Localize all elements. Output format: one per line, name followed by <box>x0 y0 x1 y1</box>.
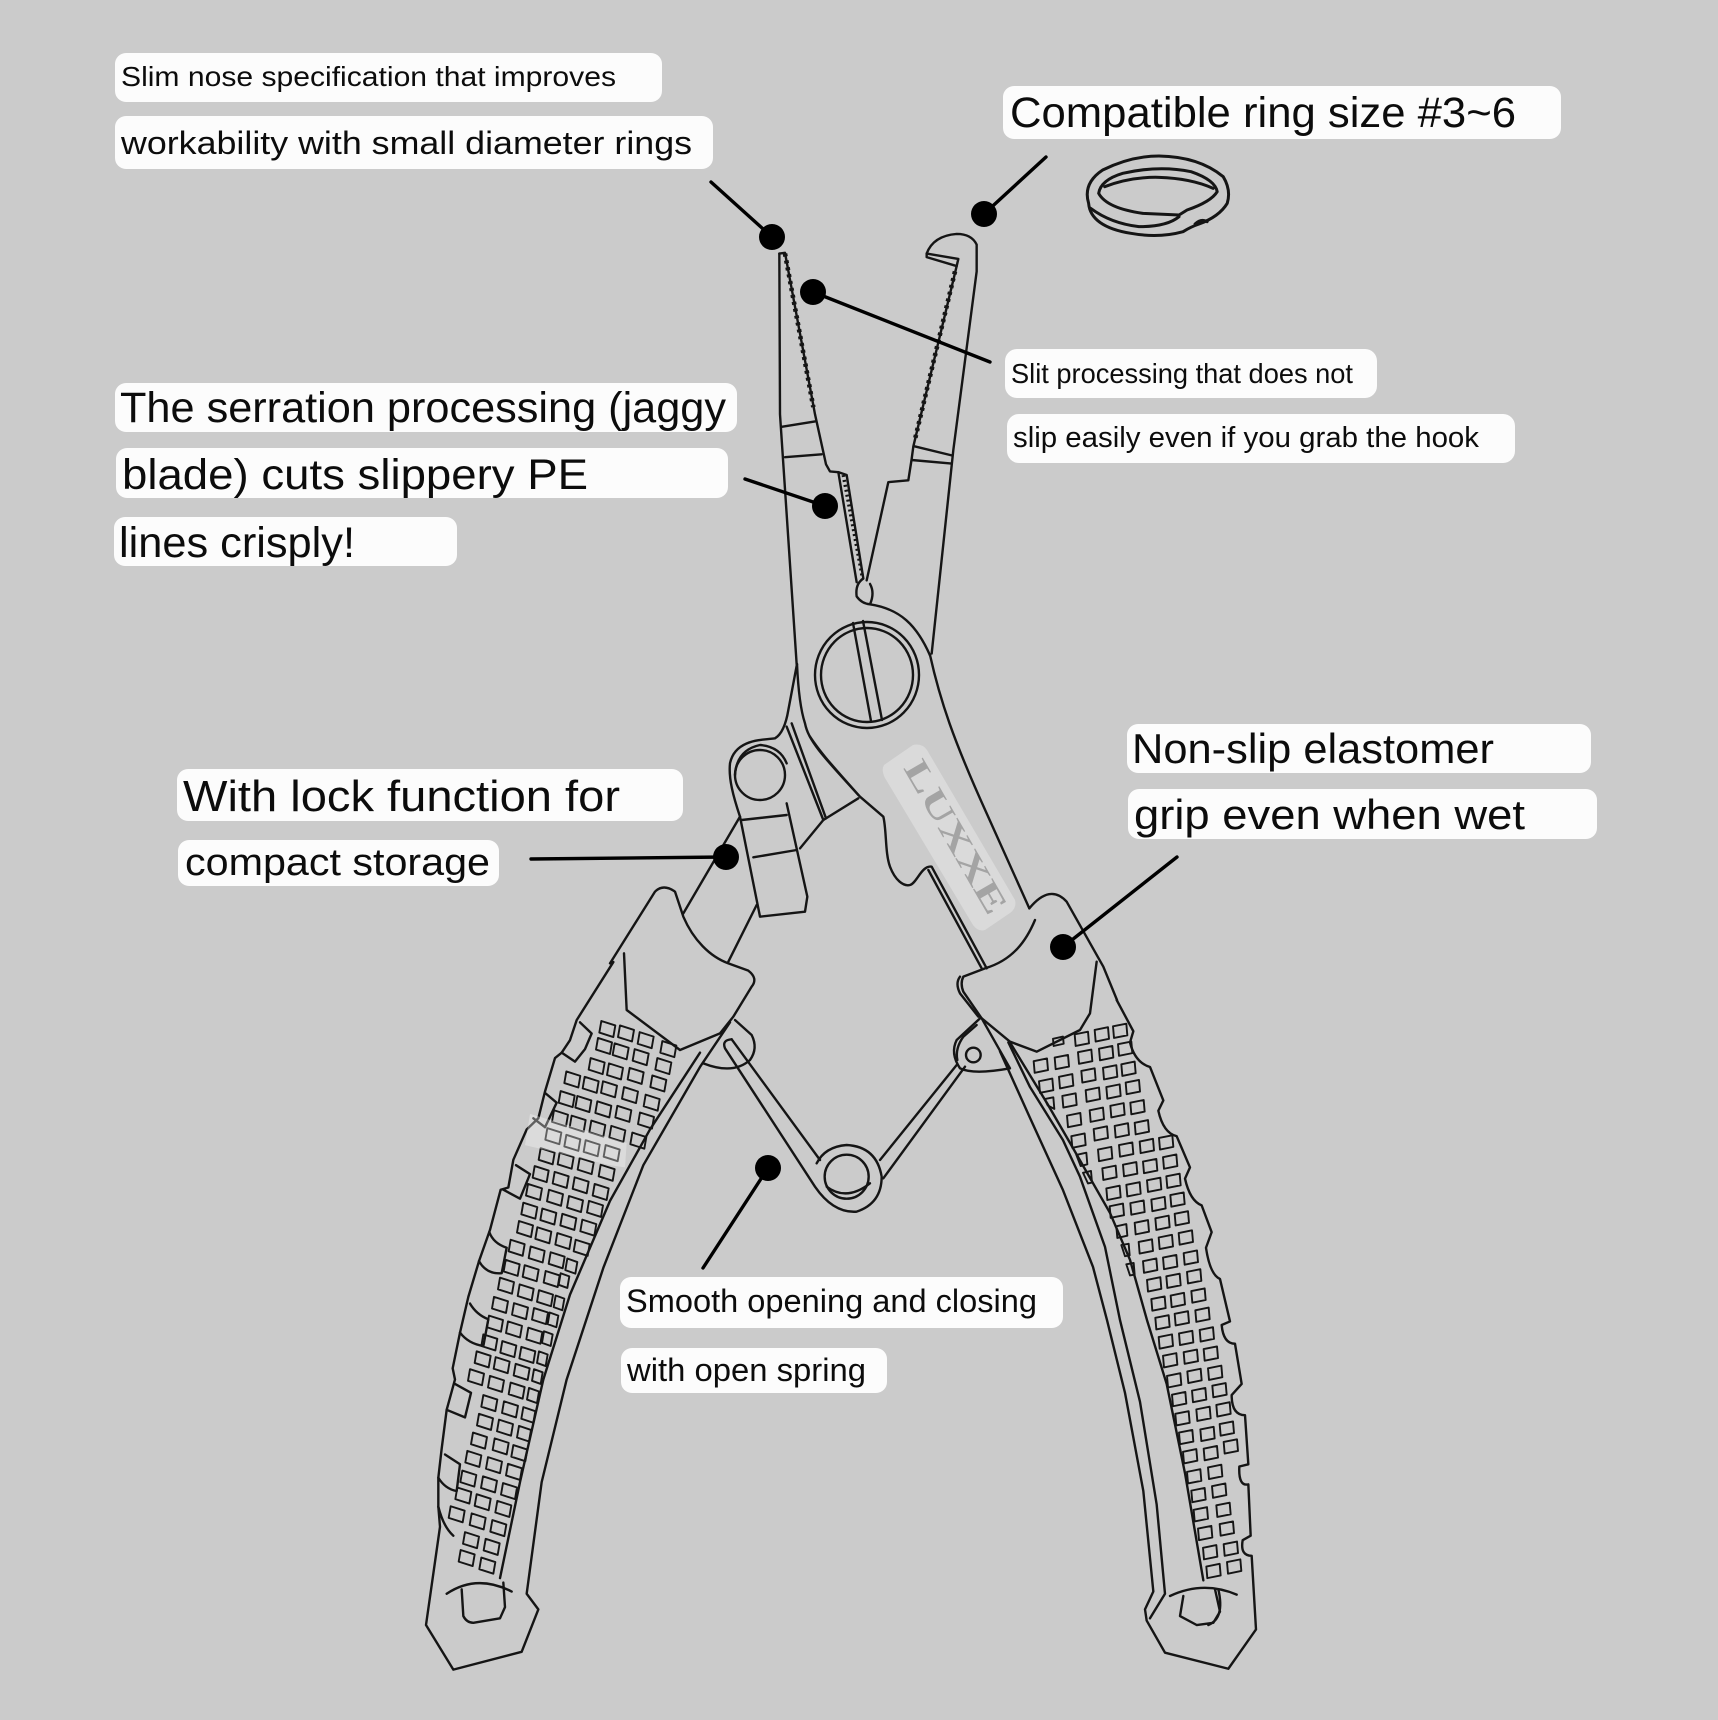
glare <box>525 1114 627 1167</box>
callout: slit processing: Slit processing that does not <box>1011 358 1353 389</box>
callout: slit processing: slip easily even if you grab the hook <box>1013 422 1479 454</box>
callout: elastomer grip: Non-slip elastomer <box>1132 725 1494 772</box>
callout: compatible ring size: Compatible ring size #3~6 <box>1010 89 1516 137</box>
callout: lock function <box>177 769 683 886</box>
left grip texture <box>449 1021 676 1574</box>
left grip head <box>610 887 754 1050</box>
pointer: slim nose <box>711 182 785 250</box>
pointer: elastomer grip <box>1050 857 1177 960</box>
pivot screw <box>815 621 919 728</box>
callout: lock function: compact storage <box>185 842 490 884</box>
pointer: ring size <box>971 157 1046 227</box>
jaws <box>779 234 977 664</box>
icon: split ring <box>1087 156 1229 235</box>
callout: serration processing <box>114 383 737 567</box>
pointer: lock function <box>531 844 739 870</box>
right grip texture <box>1034 1024 1241 1578</box>
LUXXE logo plate <box>883 745 1015 930</box>
pliers illustration <box>426 234 1256 1670</box>
right handle <box>1000 1000 1256 1669</box>
callout: elastomer grip: grip even when wet <box>1134 791 1525 838</box>
LUXXE logo plate: LUXXE <box>896 754 1014 921</box>
callout: slim nose: Slim nose specification that improves <box>121 61 616 92</box>
callout pointers <box>531 157 1177 1268</box>
spring anchors <box>703 1020 755 1068</box>
callout: serration processing: blade) cuts slippery PE <box>122 451 588 499</box>
callout: open spring: with open spring <box>626 1352 866 1388</box>
right grip head <box>1029 894 1117 1000</box>
left handle <box>426 962 730 1670</box>
callout: slim nose <box>115 53 713 169</box>
pointer: open spring <box>703 1155 781 1268</box>
callout: open spring <box>620 1277 1063 1393</box>
callout: elastomer grip <box>1127 724 1597 839</box>
pointer: serration <box>745 479 838 519</box>
lock lever, spring and handle heads <box>610 655 1117 1212</box>
open spring <box>732 1039 820 1160</box>
callout: slim nose: workability with small diameter rings <box>120 125 692 161</box>
callout: serration processing: The serration processing (jaggy <box>120 384 727 432</box>
pointer: slit processing <box>800 279 990 362</box>
callout: lock function: With lock function for <box>183 772 620 821</box>
callout: slit processing <box>1005 349 1515 463</box>
callout: open spring: Smooth opening and closing <box>626 1283 1037 1319</box>
callout: serration processing: lines crisply! <box>119 519 355 567</box>
